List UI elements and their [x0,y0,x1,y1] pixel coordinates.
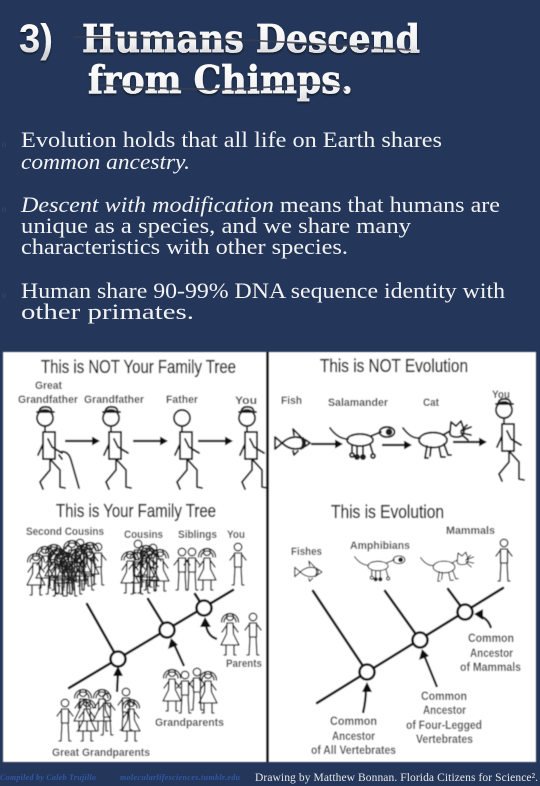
parents [221,613,262,670]
callout: common ancestor of mammals [460,631,521,674]
panel: evolution: Fishes [291,546,322,558]
panel: your family tree: This is Your Family Tree [56,500,216,521]
callout: common ancestor of four-legged vertebrates: Common [421,689,467,703]
callout: common ancestor of mammals: Common [468,631,514,645]
callout: common ancestor of all vertebrates [311,714,396,757]
bullet 1: Evolution holds that all life on Earth shares [21,127,442,152]
illustration panel [3,352,536,762]
bullet 2 [2,192,500,259]
panel: evolution: This is Evolution [331,501,444,522]
parents: Parents [226,658,262,670]
panel: not your family tree: Father [166,394,199,406]
bullet 3 [2,278,505,324]
cousins crowd [121,540,169,594]
bullet 3: o [2,290,7,300]
great grandparents [52,688,150,759]
panel: evolution: Amphibians [350,540,410,552]
panel: your family tree [26,500,262,759]
panel: your family tree: Siblings [178,529,217,541]
panel: not your family tree: Grandfather [84,394,145,406]
panel: not your family tree: Grandfather [18,394,79,406]
callout: common ancestor of mammals: Ancestor [470,646,513,660]
panel: not evolution: You [492,389,510,401]
bullet 2: o [2,204,7,214]
panel: not your family tree [18,356,267,489]
bullet list [2,127,505,324]
family tree diagram [69,590,233,692]
panel: evolution [291,501,521,757]
panel: not your family tree: Great [35,380,62,392]
footer credits: Compiled by Caleb Trujillo [0,773,96,782]
bullet 2: unique as a species, and we share many [21,213,412,238]
panel: your family tree: Cousins [124,529,163,541]
strike-through lines on title [74,37,410,90]
title: Humans Descend [82,16,420,61]
callout: common ancestor of four-legged vertebrates: Vertebrates [416,732,473,746]
title: 3) [19,17,53,61]
callout: common ancestor of mammals: of Mammals [460,660,521,674]
bullet 1 [2,127,442,174]
panel: not your family tree: This is NOT Your Family Tree [41,356,236,377]
panel: not evolution: Salamander [328,397,389,409]
bullet 2: characteristics with other species. [21,234,348,259]
bullet 2: Descent with modification means that humans are [20,192,500,217]
panel: not evolution: This is NOT Evolution [320,355,468,376]
panel: not evolution: Cat [423,397,439,409]
bullet 1: o [2,139,7,149]
great grandparents: Great Grandparents [52,747,150,759]
callout: common ancestor of all vertebrates: Common [330,714,377,728]
second cousins crowd [27,539,106,596]
title: from Chimps. [88,57,353,102]
evolution tree diagram [313,588,503,713]
callout: common ancestor of four-legged vertebrates: Ancestor [423,703,466,717]
siblings and you [174,543,246,590]
callout: common ancestor of all vertebrates: of All Vertebrates [311,743,396,757]
panel: not your family tree: You [235,395,257,407]
grandparents [155,668,224,729]
footer credits: molecularlifesciences.tumblr.edu [120,773,241,782]
panel: your family tree: You [227,529,245,541]
callout: common ancestor of all vertebrates: Ancestor [332,729,375,743]
panel: not evolution: Fish [281,395,302,407]
bullet 3: Human share 90-99% DNA sequence identity with [21,278,505,303]
footer credits: Drawing by Matthew Bonnan. Florida Citizens for Science². [255,772,538,784]
grandparents: Grandparents [155,717,224,729]
callout: common ancestor of four-legged vertebrates: of Four-Legged [406,718,482,732]
panel: your family tree: Second Cousins [26,526,104,538]
panel: evolution: Mammals [446,525,495,537]
bullet 1: common ancestry. [21,149,190,174]
title [19,16,420,102]
footer credits [0,772,538,784]
callout: common ancestor of four-legged vertebrates [406,689,482,746]
panel: not evolution [275,355,524,481]
bullet 3: other primates. [21,299,194,324]
